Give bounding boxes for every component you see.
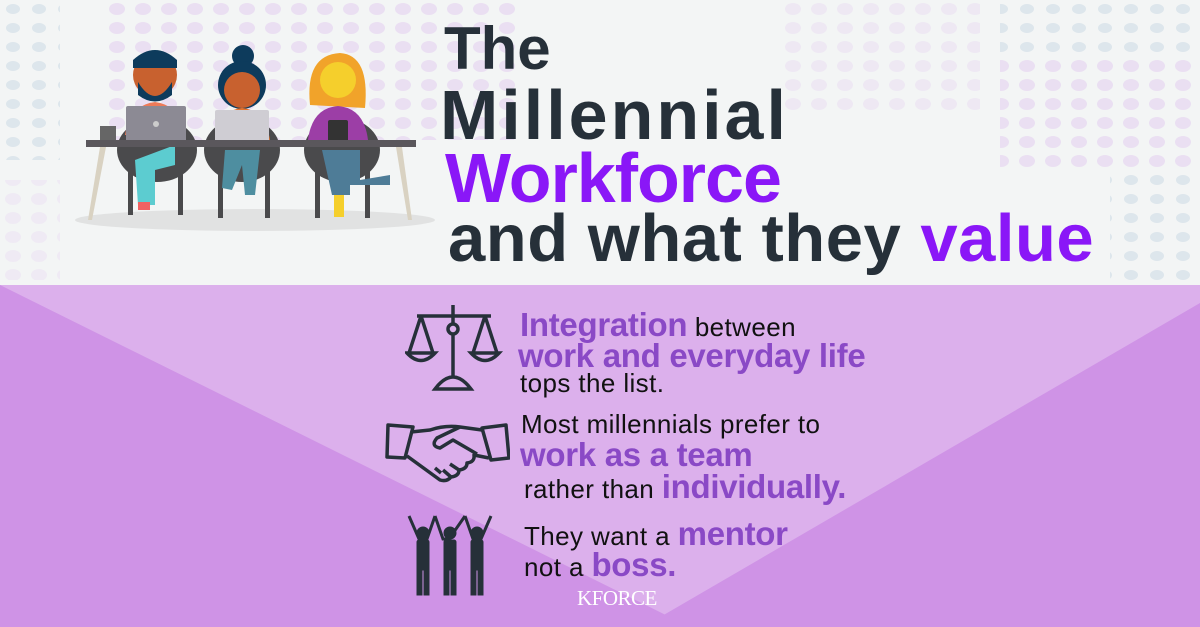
illustration: millennials at desk <box>75 45 435 231</box>
background dot pattern <box>5 3 1191 280</box>
text block: mentor <box>524 515 788 583</box>
text block: team: work as a team <box>520 436 752 473</box>
icon: handshake <box>385 423 510 482</box>
text block: team <box>520 409 846 505</box>
text block: team: rather than individually. <box>524 468 846 505</box>
text block: integration: Integration between <box>520 306 796 343</box>
text block: team: Most millennials prefer to <box>521 409 820 439</box>
logo: KFORCE: KFORCE <box>577 586 657 610</box>
text block: mentor: not a boss. <box>524 546 676 583</box>
icon: team of three <box>408 515 492 596</box>
text block: integration: tops the list. <box>520 368 664 398</box>
icon: scales <box>405 305 503 391</box>
title: and what they value <box>448 201 1094 276</box>
text block: integration: work and everyday life <box>518 337 865 374</box>
title <box>440 15 1094 276</box>
text block: mentor: They want a mentor <box>524 515 788 552</box>
bottom purple panel <box>0 285 1200 627</box>
title: Millennial <box>440 76 789 154</box>
title: The <box>444 15 551 82</box>
text block: integration <box>518 306 865 398</box>
title: Workforce <box>445 139 781 217</box>
